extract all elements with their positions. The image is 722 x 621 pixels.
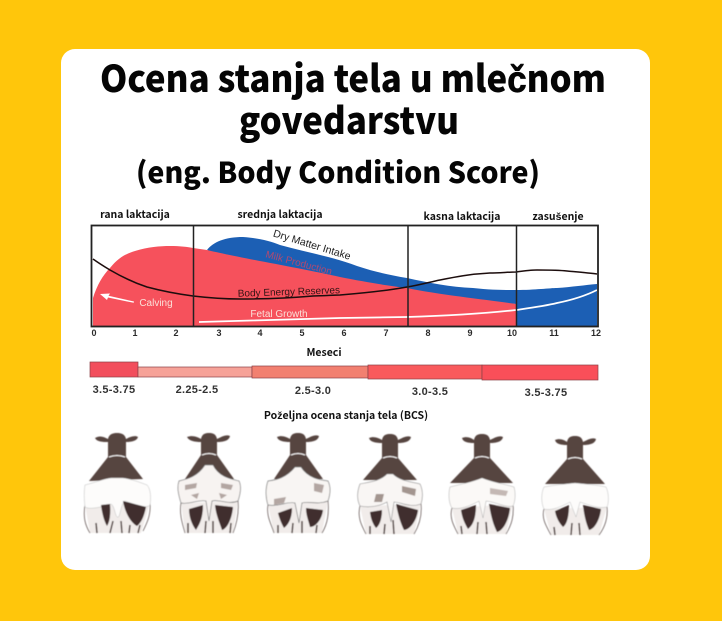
title: govedarstvu — [239, 91, 459, 145]
subtitle: (eng. Body Condition Score) — [136, 150, 540, 192]
label: dry matter intake: Dry Matter Intake — [272, 228, 352, 263]
arrow: calving — [100, 294, 134, 303]
label: fetal growth: Fetal Growth — [250, 309, 308, 320]
label: body energy reserves: Body Energy Reserves — [238, 285, 340, 300]
month axis numbers: 7 — [383, 328, 389, 338]
BCS values: 2.25-2.5 — [176, 384, 218, 396]
BCS bars — [90, 362, 598, 380]
chart frame — [92, 225, 598, 326]
lactation chart — [92, 225, 598, 326]
month axis numbers: 1 — [132, 328, 138, 338]
lactation stage labels: zasušenje — [532, 209, 584, 224]
month axis numbers: 0 — [91, 328, 97, 338]
cow 6 — [542, 436, 608, 535]
axis title: Meseci — [306, 345, 342, 360]
title — [100, 49, 606, 145]
month axis numbers: 3 — [216, 328, 222, 338]
BCS values: 3.5-3.75 — [93, 384, 135, 396]
month axis numbers: 12 — [591, 328, 601, 338]
blue area: dry matter intake — [207, 237, 597, 326]
cow 3 — [266, 433, 330, 533]
month axis numbers: 2 — [173, 328, 179, 338]
cow 1 — [84, 433, 151, 533]
lactation stage labels: kasna laktacija — [424, 209, 500, 224]
BCS values — [93, 384, 567, 399]
lactation stage labels: rana laktacija — [100, 207, 170, 222]
cows heading: Poželjna ocena stanja tela (BCS) — [264, 408, 428, 423]
lactation stage labels — [100, 207, 584, 224]
label: calving: Calving — [139, 298, 173, 309]
line: fetal growth — [199, 290, 597, 322]
BCS values: 2.5-3.0 — [295, 385, 331, 397]
month axis numbers: 11 — [549, 328, 559, 338]
BCS values: 3.0-3.5 — [412, 386, 448, 398]
cow 2 — [178, 433, 241, 533]
month axis numbers: 4 — [257, 328, 263, 338]
cow 5 — [449, 434, 515, 534]
month axis numbers — [91, 328, 601, 338]
month axis numbers: 9 — [467, 328, 473, 338]
title: Ocena stanja tela u mlečnom — [100, 49, 606, 103]
line: body energy reserves — [93, 259, 597, 299]
month axis numbers: 6 — [341, 328, 347, 338]
red area: milk production — [93, 246, 516, 326]
month axis numbers: 5 — [299, 328, 305, 338]
month axis numbers: 10 — [507, 328, 517, 338]
background panel — [61, 49, 650, 570]
cow 4 — [358, 434, 422, 534]
month axis numbers: 8 — [425, 328, 431, 338]
lactation stage labels: srednja laktacija — [237, 207, 323, 222]
BCS values: 3.5-3.75 — [525, 387, 567, 399]
label: milk production: Milk Production — [264, 249, 333, 278]
